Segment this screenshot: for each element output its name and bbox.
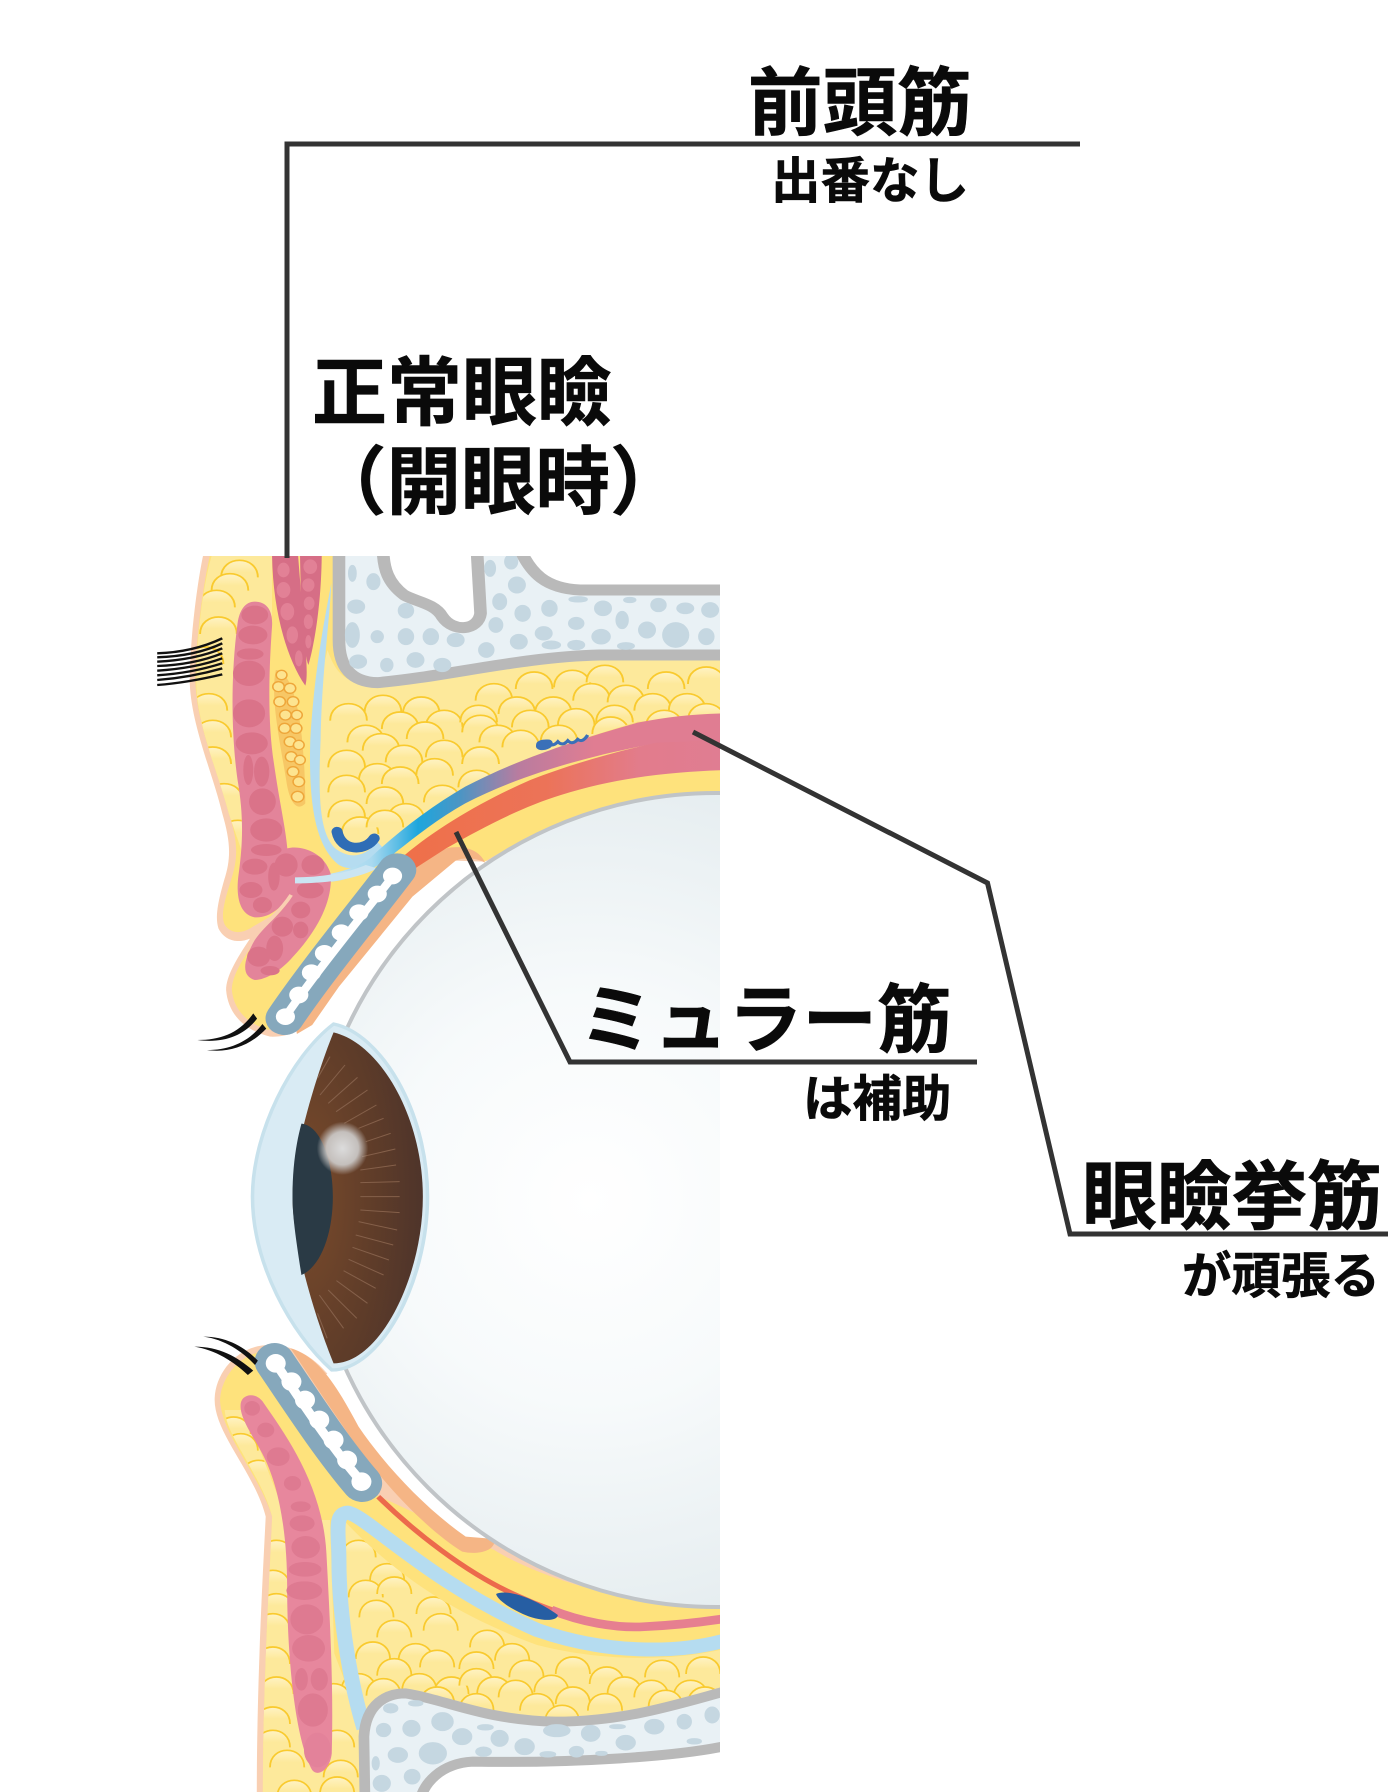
- orange gland: [273, 670, 305, 807]
- label: Müller muscle: ミュラー筋: [579, 979, 952, 1062]
- cornea and iris: [252, 1024, 427, 1370]
- upper eyelid cross-section: [157, 540, 733, 1051]
- tear gap: [305, 861, 484, 1030]
- sublabel: works hard: が頑張る: [1182, 1249, 1380, 1304]
- frontalis muscle: [272, 550, 322, 686]
- iris radial fibres: [317, 1057, 400, 1338]
- upper lid skin: [190, 556, 500, 1037]
- pupil: [292, 1124, 333, 1275]
- leader line: frontalis: [287, 144, 1080, 558]
- heading: normal eyelid: 正常眼瞼: [312, 351, 612, 435]
- lid crease: [249, 895, 291, 938]
- blue vessel ellipse: [496, 1593, 558, 1620]
- lower fat: [216, 1387, 734, 1792]
- leader line: Müller: [456, 832, 977, 1062]
- lower orbicularis muscle: [241, 1395, 332, 1773]
- iris: [292, 1032, 423, 1363]
- septum tip highlight: [295, 865, 377, 883]
- orbital and preseptal fat: [196, 556, 720, 856]
- Müller muscle: [405, 740, 725, 875]
- corneal highlight: [317, 1122, 368, 1175]
- upper bone pores: [346, 555, 718, 671]
- label: frontalis: 前頭筋: [748, 62, 972, 145]
- eyeball: [344, 791, 720, 1609]
- lower eyelid cross-section: [194, 1337, 734, 1792]
- lower septum: [338, 1513, 726, 1728]
- label: levator muscle: 眼瞼挙筋: [1082, 1155, 1382, 1239]
- lower tarsus: [266, 1354, 371, 1491]
- cornea: [252, 1024, 427, 1370]
- blue hook vessel: [337, 832, 374, 848]
- heading: eyes open: （開眼時）: [312, 441, 685, 524]
- lower orbicularis cells: [244, 1401, 331, 1767]
- septum: [310, 583, 385, 868]
- sublabel: assists: は補助: [803, 1072, 952, 1127]
- sublabel: frontalis not used: 出番なし: [771, 154, 969, 209]
- lower lid lashes: [194, 1337, 258, 1375]
- conjunctiva strip: [293, 847, 485, 1034]
- lower retractor thin band: [376, 1495, 553, 1610]
- upper eyelashes: [157, 638, 222, 685]
- lower bone pores: [373, 1701, 719, 1791]
- lower lid skin: [214, 1345, 585, 1792]
- lower retractor pink band: [551, 1610, 726, 1627]
- upper lid inner tissue: [195, 550, 725, 1030]
- levator muscle: [330, 714, 720, 882]
- lower conjunctiva strip: [291, 1348, 494, 1553]
- lower tear gap: [326, 1374, 486, 1538]
- orbicularis cells: [233, 606, 324, 975]
- lower bone: [364, 1690, 730, 1792]
- upper bone: [339, 547, 729, 683]
- lower lid inner tissue: [220, 1352, 726, 1792]
- blue squiggle vessel: [536, 735, 588, 750]
- upper lid margin lashes: [197, 1013, 266, 1051]
- anatomy illustration panel: [157, 556, 1016, 1792]
- orbicularis muscle: [233, 602, 331, 980]
- upper tarsus: [276, 868, 402, 1025]
- leader line: levator: [693, 732, 1388, 1234]
